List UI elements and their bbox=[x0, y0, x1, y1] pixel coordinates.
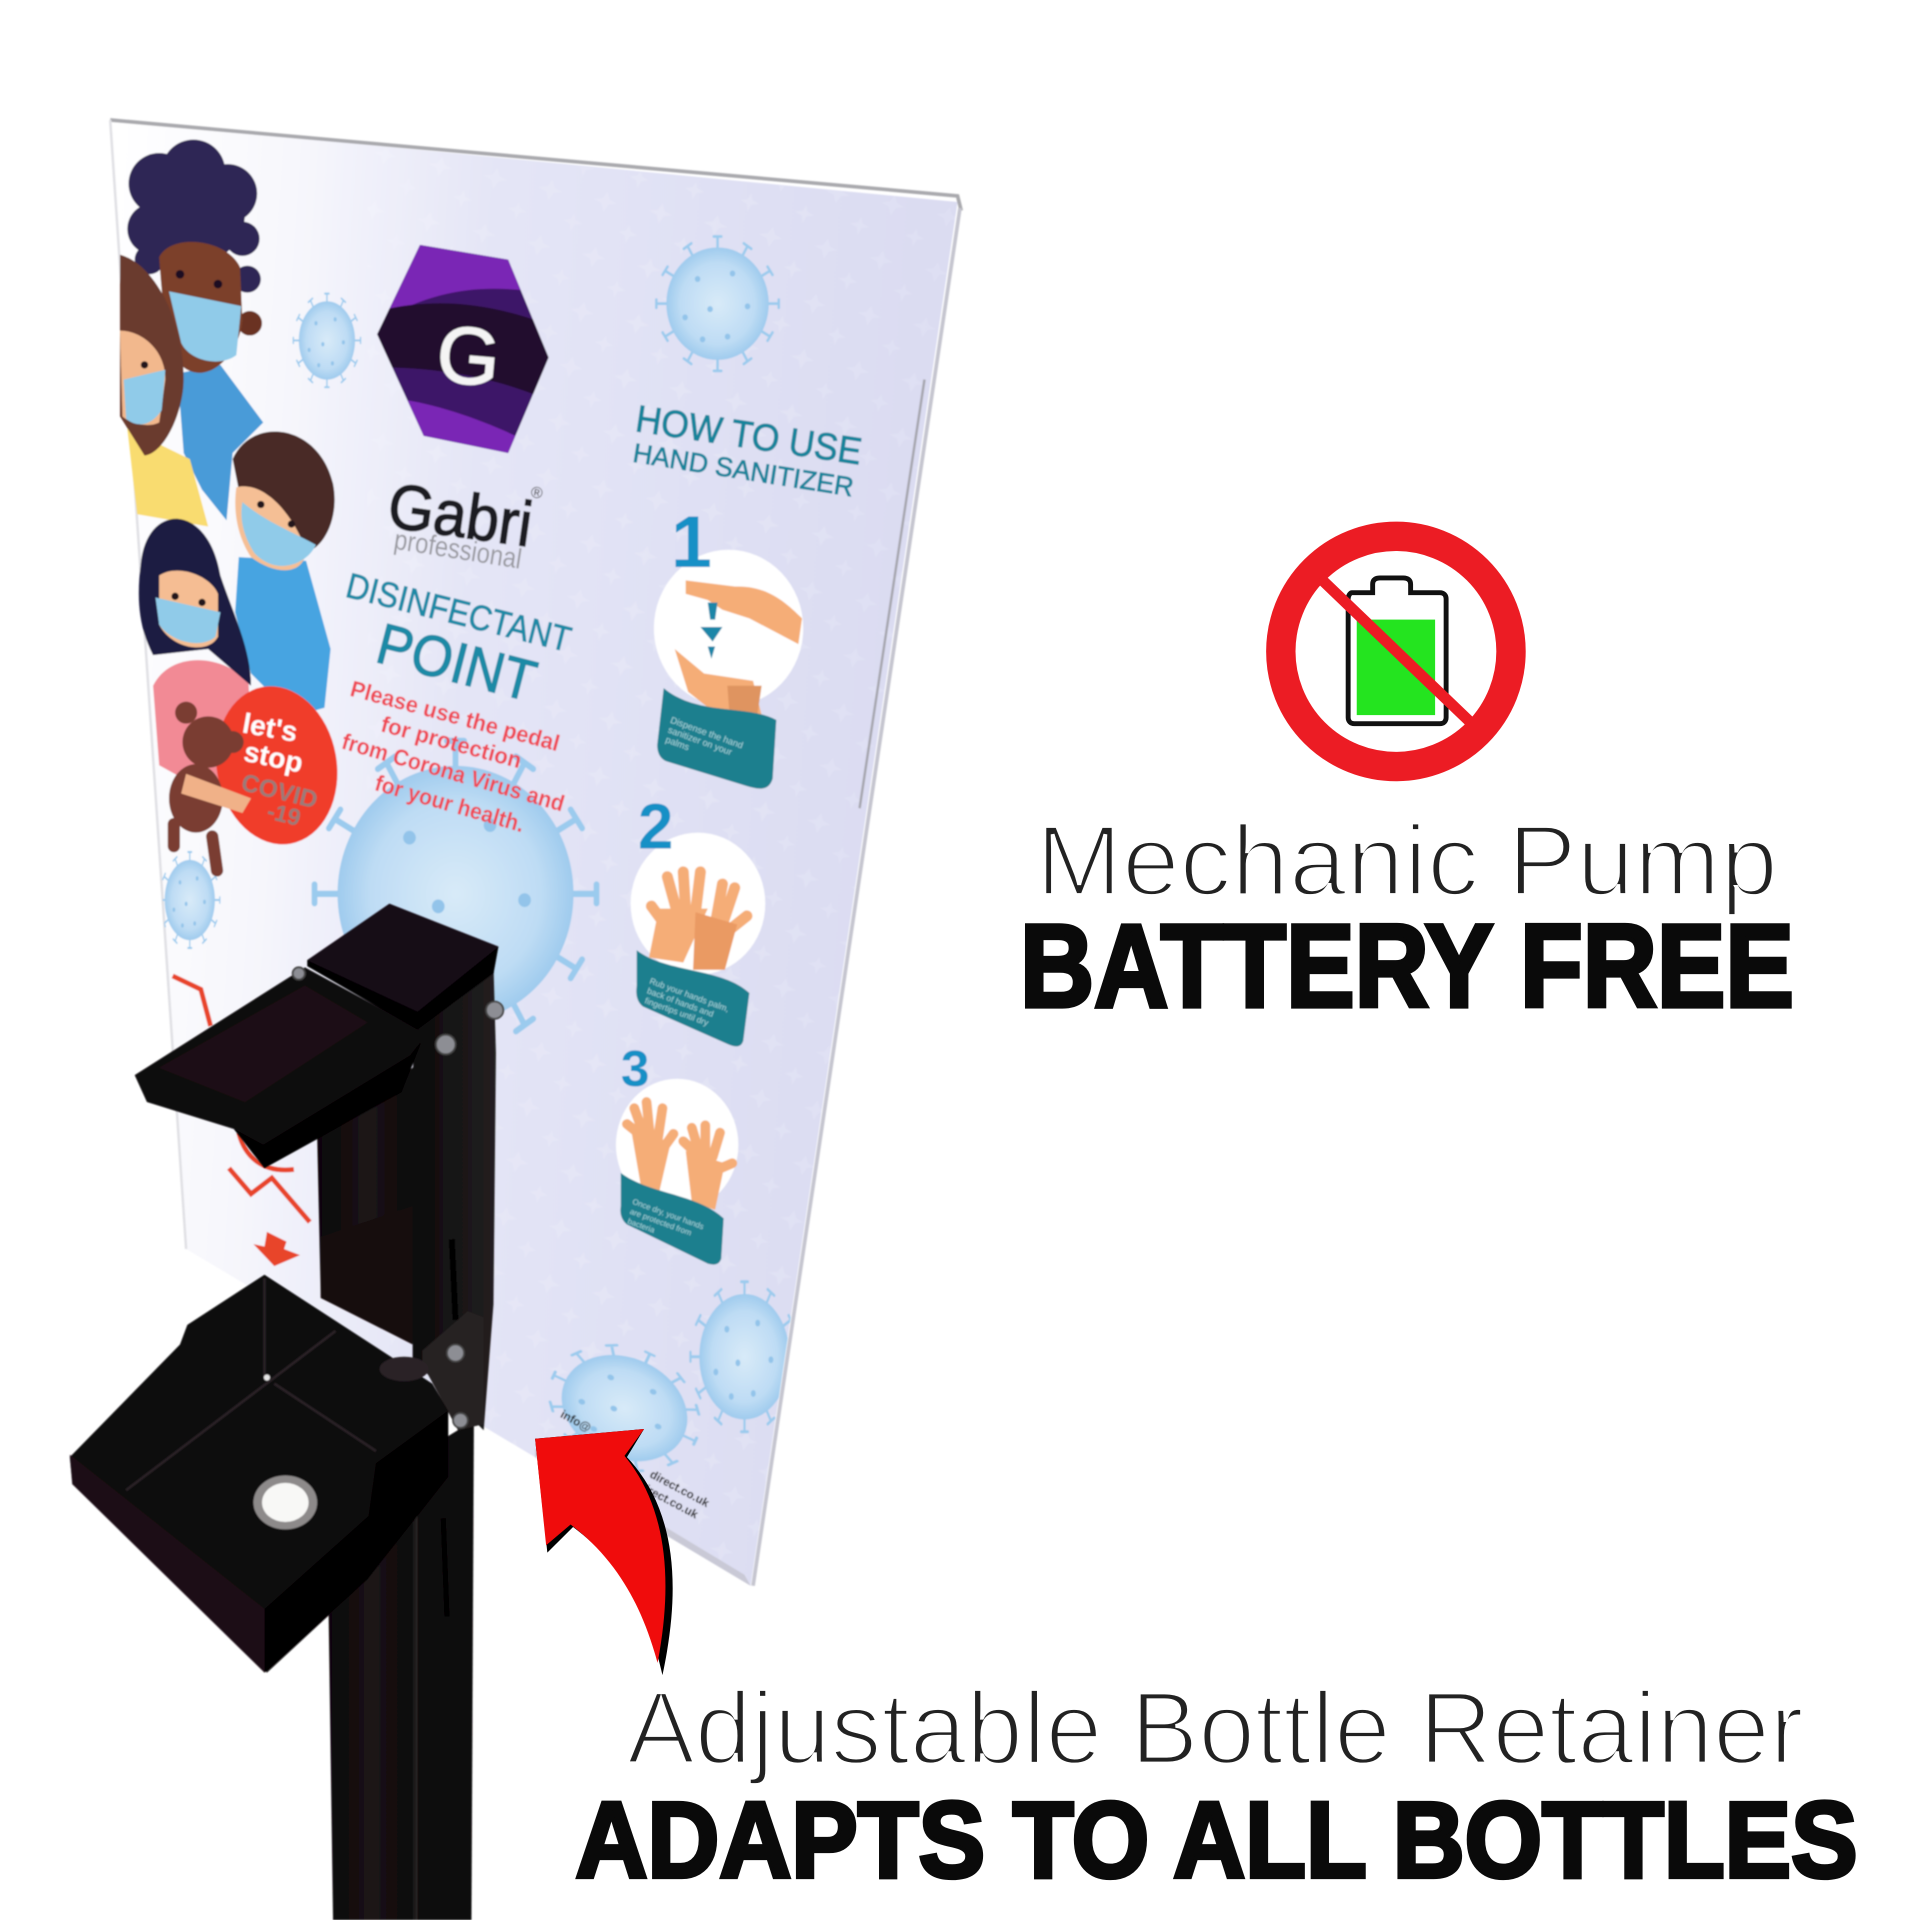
heading: adjustable bottle retainer: Adjustable Bottle Retainer bbox=[627, 1670, 1804, 1785]
virus: bottom right bbox=[690, 1282, 798, 1432]
heading: battery free: BATTERY FREE bbox=[1020, 901, 1794, 1032]
label: step 2 caption bbox=[636, 950, 749, 1046]
pedal lever bbox=[135, 967, 422, 1168]
label: step 2 caption: Rub your hands palm, bbox=[648, 976, 730, 1014]
step 2: rub: 2 bbox=[638, 792, 673, 863]
label: step 1 caption: Dispense the hand bbox=[669, 715, 744, 750]
label: step 3 caption bbox=[620, 1173, 724, 1265]
heading: how to use hand sanitizer: HOW TO USE bbox=[633, 398, 864, 474]
person: left figure with brown hair bbox=[120, 255, 208, 527]
label: step 1 caption bbox=[657, 688, 776, 789]
virus: big background virus bbox=[315, 741, 597, 1047]
step 3: dry hands: 3 bbox=[621, 1039, 649, 1097]
icon: teddy bear bbox=[168, 702, 251, 877]
virus: small top-left bbox=[293, 294, 361, 387]
virus: top-right bbox=[656, 236, 779, 371]
viruses on the poster background bbox=[160, 236, 798, 1496]
icon: dispensing hand bbox=[686, 580, 802, 644]
icon: open hands bbox=[627, 1102, 732, 1210]
prohibition ring bbox=[1281, 536, 1511, 767]
logo: purple hexagon with G bbox=[376, 244, 550, 454]
heading: disinfectant point: DISINFECTANT bbox=[342, 565, 575, 660]
person: boy with mask bbox=[233, 432, 335, 716]
lower post bbox=[328, 1420, 474, 1920]
text: pedal instructions: Please use the pedal bbox=[348, 675, 563, 756]
upper post bbox=[317, 965, 496, 1430]
label: step 1 caption: palms bbox=[664, 735, 691, 752]
heading: disinfectant point bbox=[342, 565, 575, 714]
text: pedal instructions bbox=[339, 675, 567, 837]
label: step 2 caption: fingertips until dry bbox=[643, 995, 711, 1028]
bottle hole bbox=[253, 1476, 317, 1529]
heading: how to use hand sanitizer: HAND SANITIZER bbox=[631, 438, 856, 502]
text: pedal instructions: from Corona Virus and bbox=[339, 728, 567, 816]
person: top figure with curly hair bbox=[127, 140, 263, 520]
step 1: dispense: 1 bbox=[671, 500, 712, 583]
step 3: dry hands bbox=[616, 1039, 738, 1265]
heading: mechanic pump: Mechanic Pump bbox=[1036, 805, 1778, 917]
pedal top plate bbox=[307, 904, 498, 1030]
text: pedal instructions: for protection bbox=[378, 711, 525, 773]
icon: rubbing hands bbox=[651, 872, 747, 931]
product: black dispenser stand bbox=[70, 904, 503, 1920]
virus: bottom centre bbox=[548, 1343, 701, 1473]
label: step 3 caption: Once dry, your hands bbox=[631, 1197, 705, 1231]
step 2: rub bbox=[631, 792, 765, 1046]
text: contact details: irect.co.uk bbox=[643, 1483, 701, 1522]
virus: lower-left small bbox=[160, 852, 220, 948]
label: step 1 caption: sanitizer on your bbox=[667, 725, 733, 757]
badge: let's stop COVID-19 bbox=[204, 677, 350, 854]
bolts bbox=[293, 967, 503, 1428]
arrow: red curved pointer to retainer bbox=[535, 1429, 673, 1675]
label: step 3 caption: bacteria bbox=[626, 1217, 656, 1235]
icon: no battery symbol bbox=[1281, 536, 1511, 767]
label: step 3 caption: are protected from bbox=[629, 1207, 693, 1238]
badge: let's stop COVID-19: COVID bbox=[239, 769, 320, 814]
label: step 2 caption: back of hands and bbox=[646, 986, 715, 1019]
bottle tray bbox=[70, 1275, 448, 1673]
heading: disinfectant point: POINT bbox=[370, 612, 543, 714]
logo: purple hexagon with G: G bbox=[433, 309, 504, 404]
battery bbox=[1348, 578, 1446, 724]
badge: let's stop COVID-19: -19 bbox=[265, 798, 303, 831]
logo text: Gabri professional: professional bbox=[392, 524, 524, 575]
text: contact details: info@ bbox=[558, 1408, 593, 1435]
text: contact details bbox=[558, 1408, 712, 1522]
icon: red foot pedal pictogram bbox=[173, 976, 310, 1266]
text: contact details: direct.co.uk bbox=[648, 1468, 712, 1510]
person: girl with teddy bbox=[139, 519, 251, 796]
logo text: Gabri professional: Gabri bbox=[384, 470, 537, 561]
step 1: dispense bbox=[654, 500, 803, 789]
text: pedal instructions: for your health. bbox=[372, 770, 528, 837]
panel: sanitizer poster board bbox=[110, 120, 961, 1586]
badge: let's stop COVID-19: stop bbox=[241, 736, 306, 779]
illustration: group of masked people bbox=[120, 140, 335, 796]
badge: let's stop COVID-19: let's bbox=[240, 708, 300, 748]
logo text: Gabri professional: ® bbox=[530, 484, 544, 503]
